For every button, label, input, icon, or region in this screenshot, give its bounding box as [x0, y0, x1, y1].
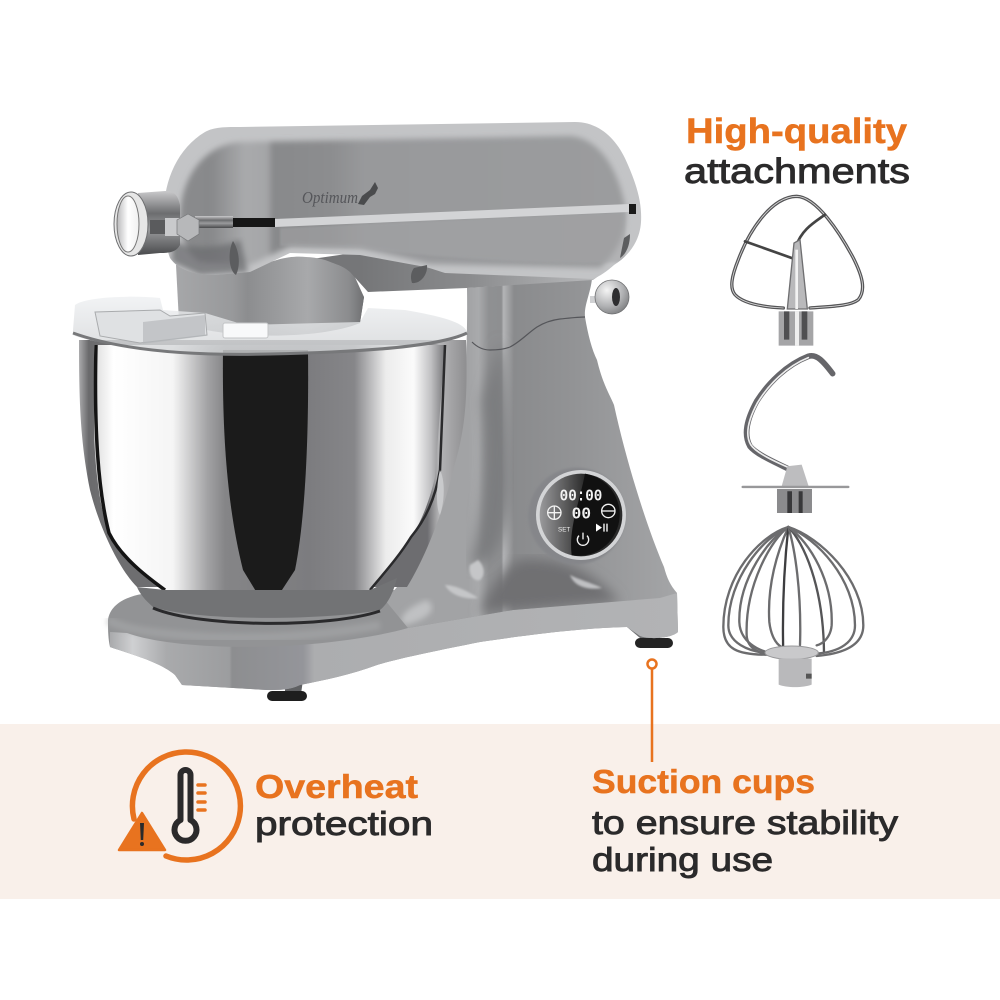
- column seam: [472, 317, 585, 350]
- bowl base ring: [137, 578, 397, 618]
- heading: high-quality attachments: High-quality: [686, 112, 908, 151]
- mixer feet: [267, 627, 673, 701]
- icon: thermometer: [174, 770, 205, 841]
- heading: high-quality attachments: attachments: [684, 152, 910, 191]
- bowl: [79, 340, 467, 593]
- control display: 00:00: [560, 487, 602, 506]
- leader line to suction cup: [648, 660, 656, 762]
- chrome stripe: [195, 204, 636, 228]
- mixer base: [108, 590, 678, 690]
- head underside shadow: [250, 252, 600, 292]
- label: suction cups: Suction cups: [592, 763, 815, 800]
- mixer column: [385, 279, 677, 628]
- front chrome knob: [114, 191, 199, 256]
- control display: [528, 468, 626, 564]
- attachment: wire whisk: [723, 527, 863, 687]
- attachment: dough hook: [743, 356, 848, 513]
- mixer head: [164, 122, 641, 279]
- logo script: Optimum: [302, 188, 358, 207]
- control display: 00: [572, 505, 591, 524]
- callout: overheat icon: [119, 752, 240, 860]
- label: overheat protection: protection: [255, 805, 433, 842]
- bottom info band: [0, 724, 1000, 899]
- label: suction cups: to ensure stability: [592, 804, 899, 841]
- product: stand mixer: [73, 122, 678, 701]
- column knob: [590, 280, 629, 314]
- neck under head: [176, 262, 364, 336]
- control display: SET: [558, 526, 570, 533]
- label: overheat protection: Overheat: [255, 768, 418, 805]
- label: suction cups: [592, 763, 899, 878]
- splash guard lid: [73, 297, 467, 354]
- label: suction cups: during use: [592, 841, 773, 878]
- vent slots: [230, 234, 630, 283]
- icon: warning triangle: [119, 813, 165, 850]
- neck dome: [245, 257, 364, 332]
- heading: high-quality attachments: [684, 112, 910, 191]
- attachment: flat beater: [732, 196, 863, 346]
- label: overheat protection: [255, 768, 433, 842]
- logo script: [302, 182, 378, 207]
